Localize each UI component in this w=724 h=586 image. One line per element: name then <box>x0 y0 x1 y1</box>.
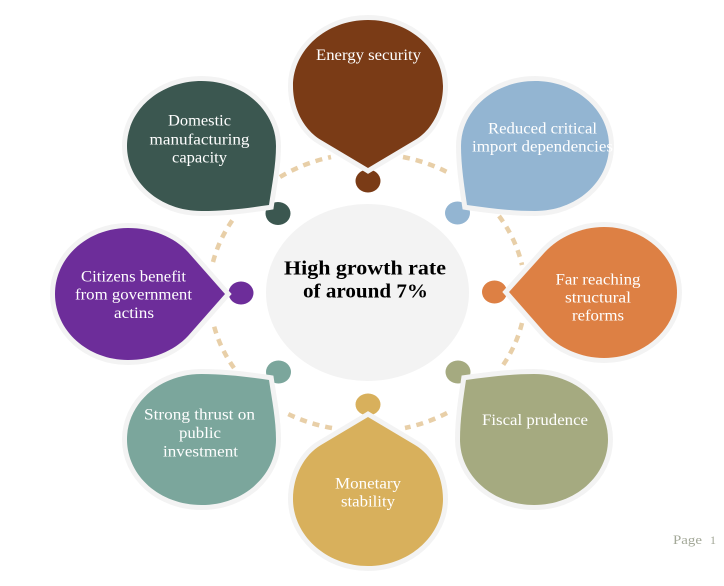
petal: Reduced critical import dependencies: Reduced critical <box>488 120 598 138</box>
title: High growth rate <box>284 258 446 280</box>
page number: 1 <box>710 533 716 547</box>
petal: Reduced critical import dependencies: import dependencies <box>472 138 613 156</box>
petal: Far reaching structural reforms: reforms <box>572 308 624 324</box>
petal: Citizens benefit from government actins: actins <box>114 305 154 322</box>
petal: Citizens benefit from government actins <box>55 228 254 360</box>
title: of around 7% <box>303 280 428 302</box>
petal: Strong thrust on public investment: investment <box>163 444 239 460</box>
page number <box>673 532 716 547</box>
petal: Citizens benefit from government actins: Citizens benefit <box>81 268 187 286</box>
petal: Strong thrust on public investment <box>127 360 291 505</box>
petal: Strong thrust on public investment: Strong thrust on <box>144 406 255 424</box>
petal: Domestic manufacturing capacity: Domestic <box>168 112 231 130</box>
petal: Strong thrust on public investment: public <box>179 425 221 442</box>
petal: Monetary stability <box>293 394 443 566</box>
petal: Far reaching structural reforms: structural <box>565 290 632 306</box>
petal: Far reaching structural reforms: Far reaching <box>556 272 640 288</box>
petal: Energy security <box>293 20 443 192</box>
page number: Page <box>673 532 702 547</box>
petal: Energy security: Energy security <box>316 47 421 64</box>
central ellipse with title <box>266 204 469 381</box>
title <box>284 258 446 302</box>
petal: Domestic manufacturing capacity: capacity <box>172 150 227 166</box>
petal: Monetary stability: Monetary <box>335 476 401 492</box>
petal: Fiscal prudence <box>446 360 608 505</box>
petal: Citizens benefit from government actins: from government <box>75 286 193 304</box>
petal: Reduced critical import dependencies <box>445 81 613 224</box>
petal: Monetary stability: stability <box>341 494 395 510</box>
petal: Domestic manufacturing capacity: manufacturing <box>150 132 250 148</box>
petal: Far reaching structural reforms <box>482 227 677 358</box>
petal: Domestic manufacturing capacity <box>127 81 290 225</box>
petal: Fiscal prudence: Fiscal prudence <box>482 412 588 429</box>
dashed ring connecting the petals <box>213 157 522 428</box>
